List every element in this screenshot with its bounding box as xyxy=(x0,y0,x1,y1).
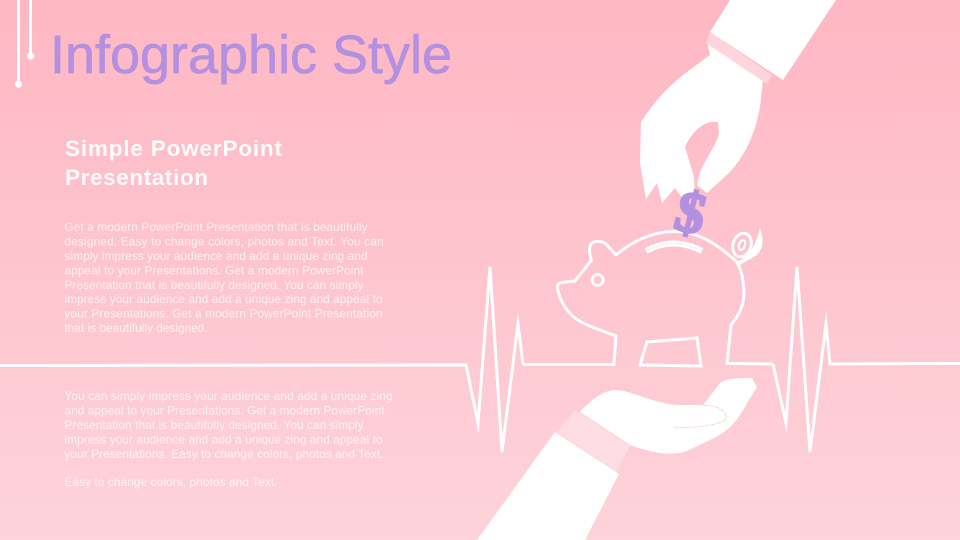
pig belly foot xyxy=(640,338,701,366)
subheading: Simple PowerPoint xyxy=(65,136,282,161)
body text: second paragraph: Presentation that is beautifully designed. You can simply xyxy=(64,419,364,432)
body text: second paragraph: your Presentations. Easy to change colors, photos and Text. xyxy=(64,448,384,461)
body text: first paragraph: simply impress your audience and add a unique zing and xyxy=(64,250,368,263)
top sleeve xyxy=(710,0,836,80)
body text: first paragraph: impress your audience and add a unique zing and appeal to xyxy=(64,293,383,306)
bottom sleeve xyxy=(477,432,619,540)
top cuff xyxy=(706,32,772,84)
piggy bank xyxy=(523,228,773,366)
heartbeat line: right xyxy=(773,267,960,452)
coin slot xyxy=(646,244,702,251)
top hand palm and fingers xyxy=(640,42,763,203)
icon: dollar sign: $ xyxy=(669,177,713,248)
pig body outline xyxy=(523,231,773,364)
body text: first paragraph: appeal to your Presentations. Get a modern PowerPoint xyxy=(64,264,364,278)
bottom hand xyxy=(477,378,757,540)
bottom palm xyxy=(580,378,757,454)
top hand xyxy=(640,0,836,203)
title: Infographic Style xyxy=(50,25,452,85)
body text: second paragraph: and appeal to your Presentations. Get a modern PowerPoint xyxy=(64,404,385,418)
pig tail xyxy=(730,228,763,267)
bottom cuff xyxy=(557,410,630,472)
body text: first paragraph: that is beautifully designed. xyxy=(64,322,208,335)
title accent lines xyxy=(15,0,34,88)
subheading: Presentation xyxy=(65,165,208,190)
palm crease xyxy=(673,405,726,428)
body text: second paragraph: You can simply impress your audience and add a unique zing xyxy=(64,390,392,403)
heartbeat line: left xyxy=(0,267,523,452)
body text: closing line: Easy to change colors, photos and Text. xyxy=(64,476,278,489)
body text: first paragraph: your Presentations. Get a modern PowerPoint Presentation xyxy=(64,308,382,320)
subheading xyxy=(65,136,282,190)
body text: second paragraph xyxy=(64,390,392,461)
body text: first paragraph: designed. Easy to change colors, photos and Text. You can xyxy=(64,236,384,248)
body text: first paragraph: Presentation that is beautifully designed. You can simply xyxy=(64,279,364,292)
body text: first paragraph xyxy=(64,221,384,335)
pig eye xyxy=(592,274,603,286)
body text: second paragraph: impress your audience and add a unique zing and appeal to xyxy=(64,434,383,446)
body text: first paragraph: Get a modern PowerPoint Presentation that is beautifully xyxy=(64,221,368,234)
